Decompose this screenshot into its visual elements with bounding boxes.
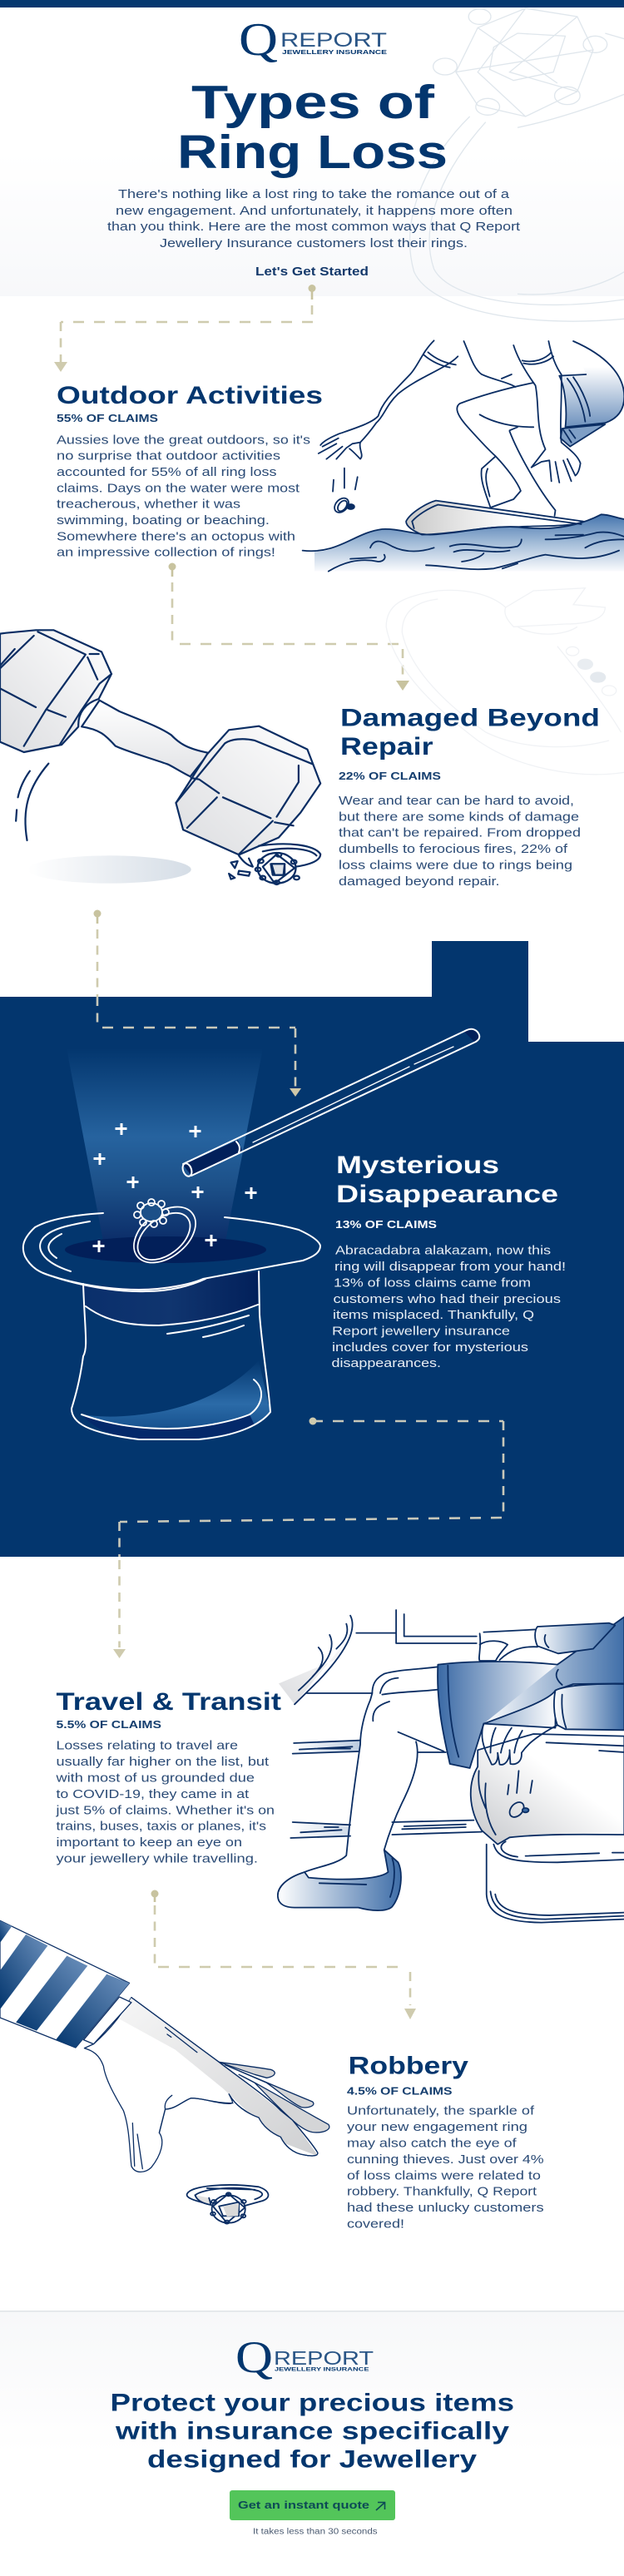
heading xyxy=(340,705,600,760)
intro text: than you think. Here are the most common ways that Q Report xyxy=(107,220,521,234)
claim share: 4.5% OF CLAIMS xyxy=(347,2086,453,2098)
quote button: Get an instant quote xyxy=(238,2499,369,2511)
intro text: Jewellery Insurance customers lost their rings. xyxy=(160,236,468,250)
description xyxy=(339,794,581,889)
description: dumbells to ferocious fires, 22% of xyxy=(339,842,568,856)
description: robbery. Thankfully, Q Report xyxy=(347,2185,537,2199)
description: covered! xyxy=(347,2217,404,2231)
footer headline: designed for Jewellery xyxy=(147,2446,478,2474)
description: important to keep an eye on xyxy=(57,1835,242,1850)
description: Report jewellery insurance xyxy=(332,1325,510,1339)
illustration: top hat xyxy=(23,1213,320,1440)
description: accounted for 55% of all ring loss xyxy=(57,465,276,479)
description: Wear and tear can be hard to avoid, xyxy=(339,794,574,808)
description: your jewellery while travelling. xyxy=(57,1851,258,1865)
footer headline: with insurance specifically xyxy=(115,2418,510,2445)
title xyxy=(177,76,448,179)
call to start: Let's Get Started xyxy=(255,265,369,279)
description: had these unlucky customers xyxy=(347,2201,544,2215)
title: Ring Loss xyxy=(177,126,448,179)
description: loss claims were due to rings being xyxy=(339,858,572,872)
description xyxy=(55,1739,275,1865)
footer headline: Protect your precious items xyxy=(110,2390,514,2417)
logo: Q Report: JEWELLERY INSURANCE xyxy=(282,50,387,56)
logo: Q Report xyxy=(239,14,387,66)
illustration: thief hand with striped sleeve xyxy=(0,1920,329,2172)
description: items misplaced. Thankfully, Q xyxy=(333,1308,534,1322)
description: swimming, boating or beaching. xyxy=(57,513,270,528)
description: trains, buses, taxis or planes, it's xyxy=(57,1820,266,1834)
illustration: dumbbell crushing ring xyxy=(0,630,320,884)
arrow: start to outdoor activities xyxy=(54,285,316,372)
illustration: wand xyxy=(181,1028,480,1177)
description: that can't be repaired. From dropped xyxy=(339,826,581,840)
description: ring will disappear from your hand! xyxy=(334,1260,566,1274)
description xyxy=(347,2104,544,2231)
description: usually far higher on the list, but xyxy=(57,1755,270,1769)
description: no surprise that outdoor activities xyxy=(57,449,280,463)
footer logo: REPORT xyxy=(274,2347,374,2369)
sparkles xyxy=(93,1123,256,1252)
header background panel xyxy=(0,8,624,296)
claim share: 55% OF CLAIMS xyxy=(57,413,158,424)
arrow: damaged to mysterious xyxy=(93,910,301,1097)
description: 13% of loss claims came from xyxy=(334,1276,531,1290)
heading: Mysterious xyxy=(336,1152,499,1179)
navy panel: mysterious disappearance background xyxy=(0,941,624,1557)
description: may also catch the eye of xyxy=(347,2136,518,2150)
intro text: There's nothing like a lost ring to take the romance out of a xyxy=(118,187,510,201)
illustration: surfer dropping ring xyxy=(303,340,624,572)
heading: Damaged Beyond xyxy=(340,705,600,732)
intro text xyxy=(107,187,521,250)
footer headline xyxy=(110,2390,514,2474)
hat opening xyxy=(65,1236,266,1263)
heading xyxy=(336,1152,558,1208)
arrow: outdoor to damaged xyxy=(168,562,409,691)
description: Abracadabra alakazam, now this xyxy=(335,1244,551,1258)
watermark: ring sketch top right xyxy=(410,8,624,321)
description: disappearances. xyxy=(331,1356,441,1370)
footer logo xyxy=(235,2332,374,2382)
top header bar xyxy=(0,0,624,7)
heading: Repair xyxy=(340,733,433,760)
arrow: travel to robbery xyxy=(151,1890,416,2019)
description xyxy=(331,1244,566,1370)
panel: travel and transit xyxy=(55,1610,624,1923)
claim share: 5.5% OF CLAIMS xyxy=(57,1719,161,1731)
arrow: mysterious to travel xyxy=(113,1418,503,1658)
description: cunning thieves. Just over 4% xyxy=(347,2152,544,2167)
description: of loss claims were related to xyxy=(347,2168,541,2182)
illustration: ring in hat xyxy=(123,1196,206,1274)
description: just 5% of claims. Whether it's on xyxy=(55,1803,275,1817)
footer logo: Q xyxy=(235,2332,273,2382)
panel: outdoor activities xyxy=(57,340,624,572)
description: Somewhere there's an octopus with xyxy=(57,529,295,543)
description xyxy=(57,433,310,560)
description: your new engagement ring xyxy=(347,2120,527,2134)
heading: Travel & Transit xyxy=(57,1688,281,1716)
heading: Robbery xyxy=(349,2053,469,2080)
panel: mysterious disappearance xyxy=(23,1028,566,1440)
heading: Outdoor Activities xyxy=(57,382,323,409)
watermark: second ring sketch xyxy=(386,588,624,775)
description: treacherous, whether it was xyxy=(57,498,240,512)
description: Losses relating to travel are xyxy=(57,1739,238,1753)
description: includes cover for mysterious xyxy=(332,1340,528,1355)
footer panel xyxy=(0,2311,624,2537)
illustration: seated traveller xyxy=(278,1610,624,1923)
button note: It takes less than 30 seconds xyxy=(253,2528,378,2537)
logo: Q Report: REPORT xyxy=(280,29,387,52)
claim share: 13% OF CLAIMS xyxy=(335,1219,437,1231)
description: to COVID-19, they came in at xyxy=(57,1787,250,1801)
illustration: ring on ground xyxy=(187,2185,268,2224)
intro text: new engagement. And unfortunately, it happens more often xyxy=(116,204,513,218)
footer logo: JEWELLERY INSURANCE xyxy=(275,2366,369,2373)
quote button xyxy=(230,2490,395,2520)
description: an impressive collection of rings! xyxy=(57,546,275,560)
description: customers who had their precious xyxy=(333,1292,561,1306)
title: Types of xyxy=(191,76,435,129)
heading: Disappearance xyxy=(336,1181,558,1208)
description: Unfortunately, the sparkle of xyxy=(347,2104,535,2118)
panel: robbery xyxy=(0,1920,544,2231)
panel: damaged beyond repair xyxy=(0,630,600,889)
logo: Q Report: Q xyxy=(239,14,278,66)
description: but there are some kinds of damage xyxy=(339,810,579,824)
description: damaged beyond repair. xyxy=(339,874,499,889)
description: claims. Days on the water were most xyxy=(57,481,300,495)
claim share: 22% OF CLAIMS xyxy=(339,770,441,782)
light beam xyxy=(67,1048,263,1246)
description: with most of us grounded due xyxy=(55,1771,255,1786)
description: Aussies love the great outdoors, so it's xyxy=(57,433,310,447)
